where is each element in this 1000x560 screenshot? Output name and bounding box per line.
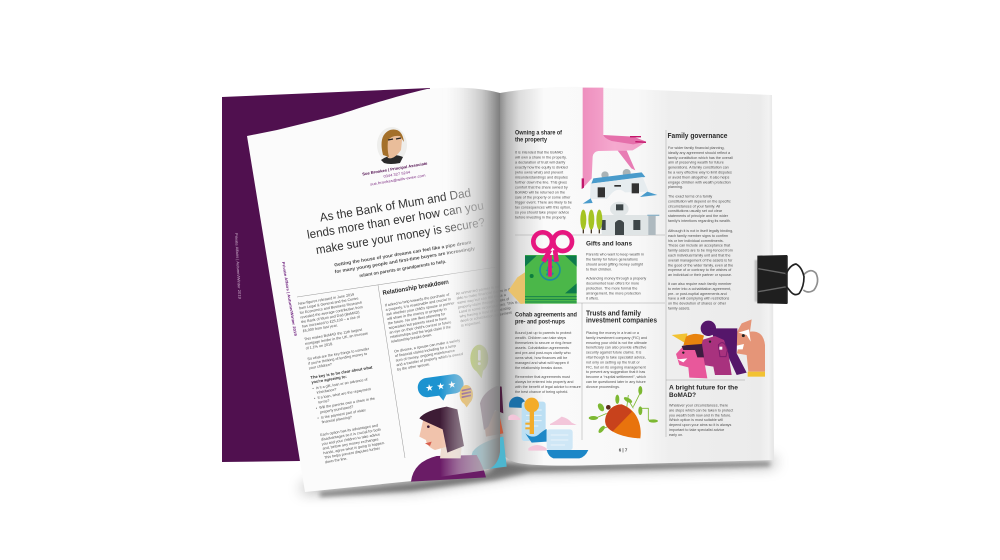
text block: owning a share: before investing in the property. xyxy=(515,216,566,220)
text block: left column: • xyxy=(315,406,318,411)
text block: cohab agreements: Remember that agreements must xyxy=(515,375,570,379)
text block: left column: Is the payment part of wider xyxy=(321,408,367,420)
text block: relationship breakdown: of financial claims including for a lump xyxy=(395,344,456,358)
text block: left column: from Legal & General and the Centre xyxy=(299,296,359,311)
contact details xyxy=(362,160,429,187)
text block: third column: able to make financial claims in the xyxy=(456,287,513,301)
text block: gifts and loans: should avoid gifting money outright xyxy=(586,262,643,266)
text block: left column: • xyxy=(317,416,320,420)
text block: left column: if you're thinking of lending money to xyxy=(308,352,367,366)
text block: left column: • xyxy=(312,387,315,391)
text block: left column: If a loan, what are the repayment xyxy=(317,387,371,400)
panel: left page xyxy=(247,88,500,492)
text block: third column: An unmarried partner is not xyxy=(455,285,500,296)
text block: left column: disadvantages so it is crucial for both xyxy=(321,428,381,442)
text block: cohab agreements: and pre-and post-nups clarify who xyxy=(515,351,571,355)
heading: bright future xyxy=(669,384,738,399)
text block: left column: This makes BoMAD the 11th largest xyxy=(304,328,362,341)
scroll two xyxy=(547,429,588,458)
text block: bright future: Whatever your circumstances, there xyxy=(669,404,728,408)
text block: family governance: engage children with wealth protection xyxy=(668,180,731,184)
text block: owning a share: will own a share in the property, xyxy=(515,156,567,160)
text block: cohab agreements: wealth. Children can take steps xyxy=(515,336,566,340)
running head on page: Private Affairs | Autumn/Winter 2019 xyxy=(281,262,297,336)
text block: left column: hands, agree what is going to happen. xyxy=(323,441,385,455)
heading: cohab agreements xyxy=(515,312,577,326)
heading: cohab agreements: pre- and post-nups xyxy=(515,318,565,326)
text block: left column: has increased to £25,100 – a rise of xyxy=(302,315,361,329)
title: make sure your money is secure? xyxy=(315,215,486,257)
text block: third column: property claim through Trusts of xyxy=(458,297,511,310)
text block: family governance: family constitution which has the overall xyxy=(668,156,733,160)
heading: trusts xyxy=(586,310,657,324)
gutter shading: left page xyxy=(440,85,500,485)
page number: 6 | 7 xyxy=(619,448,628,452)
text block: family governance: constitutions usually set out clear xyxy=(668,209,723,213)
text block: family governance: his or her individual commitments. xyxy=(668,239,724,243)
text block: family governance: statements of principle and the wider xyxy=(668,214,729,218)
text block: family governance: an individual or their partner or spouse. xyxy=(668,273,732,277)
text block: trusts: security against future claims. It is xyxy=(586,351,641,355)
text block: third column: why having a trust of ownership xyxy=(459,306,511,319)
running head on cover: Private Affairs | Autumn/Winter 2019 xyxy=(234,233,241,299)
upper tilted house xyxy=(583,169,657,204)
heading: owning a share: Owning a share of xyxy=(515,130,563,136)
text block: left column: you're agreeing to: xyxy=(311,374,347,385)
text block: relationship breakdown: will share in the money or property in xyxy=(387,307,447,321)
figure: person with cap xyxy=(672,333,707,378)
text block: bright future: important to take specialist advice xyxy=(669,428,724,432)
text block: left column xyxy=(298,291,389,464)
text block: owning a share: further down the line. This gives xyxy=(515,180,567,184)
illustration: three faces xyxy=(672,319,765,378)
text block: relationship breakdown: relationships and the legal claim if the xyxy=(390,325,451,339)
text block: third column: Land in some circumstances. This is xyxy=(459,300,518,314)
panel: right page xyxy=(500,87,774,466)
icon: exclamation bubble xyxy=(470,345,488,378)
rules: left page xyxy=(297,267,497,458)
text block: left column: of 1.1% on 2018. xyxy=(305,342,334,351)
icon: key xyxy=(524,398,539,434)
text block: family governance: family's intentions regarding its wealth. xyxy=(668,219,731,223)
heading: owning a share xyxy=(515,130,563,144)
text block: bright future: depend upon your aims so it is always xyxy=(669,423,731,427)
text block: relationship breakdown: separation but parents need to have xyxy=(388,316,447,330)
text block: relationship breakdown: relationship breaks down. xyxy=(391,333,433,344)
heading: owning a share: the property xyxy=(515,136,547,144)
text block: family governance: each family member signs to confirm xyxy=(668,234,728,238)
text block: gifts and loans: Parents who want to keep wealth in xyxy=(586,252,644,256)
text block: family governance: or avoid them altogether. It also helps xyxy=(668,175,729,179)
text block: family governance: Although it is not in itself legally binding, xyxy=(668,229,733,233)
text block: cohab agreements: with the benefit of legal advice to ensure xyxy=(515,385,581,389)
pink figure xyxy=(582,88,646,189)
text block: left column: down the line. xyxy=(325,457,348,464)
heading: trusts: Trusts and family xyxy=(586,310,641,318)
text block: family governance: each individual family unit and that the xyxy=(668,254,731,258)
contact details: Sue Brookes | Principal Associate xyxy=(362,160,429,176)
text block: family governance: For wider family financial planning, xyxy=(668,146,725,150)
text block: third column: same way but can still make a xyxy=(457,293,507,305)
subtitle: for many young people and first-time buyers are increasingly xyxy=(334,246,476,274)
text block: family governance: expense of or contrary to the wishes of xyxy=(668,268,732,272)
text block: relationship breakdown: the future. No one likes planning for xyxy=(388,312,446,326)
text block: relationship breakdown: ask whether your child's spouse or partner xyxy=(386,301,456,317)
text block: bright future: are steps which can be taken to protect xyxy=(669,408,733,412)
text block: left column: New figures released in June 2019 xyxy=(298,293,354,306)
text block: relationship breakdown: by the other spouse. xyxy=(397,362,431,372)
text block: owning a share: (who owns what) and prevent xyxy=(515,170,563,174)
text block: owning a share: a declaration of trust will clarify xyxy=(515,160,565,164)
price tag xyxy=(508,272,526,304)
illustration: fruit with vines xyxy=(589,386,658,438)
lower house xyxy=(602,202,659,235)
text block: left column: revealed the average contribution from xyxy=(300,305,363,320)
text block: left column: your children? xyxy=(309,362,332,370)
text block: relationship breakdown: sum of money, ongoing maintenance xyxy=(395,349,455,363)
text block: family governance: constitution will depend on the specific xyxy=(668,199,731,203)
text block: owning a share: comfort that the share owned by xyxy=(515,186,568,190)
text block: family governance: have a will complying with restrictions xyxy=(668,297,729,301)
pink ribbon xyxy=(533,232,572,277)
text block: relationship breakdown: If asked to help towards the purchase of xyxy=(384,292,451,307)
text block: cohab agreements: managed and what will happen if xyxy=(515,361,570,365)
title: As the Bank of Mum and Dad xyxy=(319,186,472,225)
illustration: key and scrolls xyxy=(508,397,588,458)
text block: left column: Each option has its advantages and xyxy=(320,423,378,437)
text block: cohab agreements: the best chance of being upheld. xyxy=(515,390,568,394)
text block: relationship breakdown: and a transfer of property which is owned xyxy=(396,352,463,367)
text block: left column: for Economics and Business Research xyxy=(299,301,362,315)
text block: left column: mortgage lender in the UK, an increase xyxy=(305,331,369,346)
figure: man with grey hair xyxy=(732,319,765,377)
text block: third column xyxy=(455,282,520,328)
text block: family governance: to enter into a cohabitation agreement, xyxy=(668,287,731,291)
text block: family governance: be a very effective way to limit disputes xyxy=(668,170,732,174)
text block: owning a share: It is intended that the BoMAD xyxy=(515,150,563,154)
figure: woman at left xyxy=(411,407,486,482)
heading: bright future: BoMAD? xyxy=(669,392,696,399)
text block: bright future: you wealth both now and in the future. xyxy=(669,413,731,417)
text block: gifts and loans: the family for future generations xyxy=(586,258,638,262)
trees xyxy=(580,210,602,233)
heading: Relationship breakdown: Relationship breakdown xyxy=(382,279,449,297)
text block: trusts: ensuring your child is not the ultimate xyxy=(586,341,647,345)
text block: relationship breakdown: an eye on their child's current or future xyxy=(389,320,452,335)
text block: left column: • xyxy=(314,396,316,401)
illustration: couple with speech bubbles xyxy=(411,345,507,482)
text block: third column: deed or cohabitation agreement xyxy=(460,311,512,323)
text block: trusts: can be questioned later in any future xyxy=(586,380,646,384)
text block: cohab agreements: Bound just up to parents to protect xyxy=(515,331,571,335)
text block: family governance: The exact terms of a family xyxy=(668,194,712,198)
text block: gifts and loans: protection. The more formal the xyxy=(586,286,637,290)
text block: owning a share: sale of the property or some other xyxy=(515,196,571,200)
text block: family governance: planning. xyxy=(668,185,683,189)
text block: trusts: FIC, but on its ongoing management xyxy=(586,365,646,369)
text block: family governance: It can also require each family member xyxy=(668,282,732,286)
text block: cohab agreements: owns what, how finances will be xyxy=(515,356,567,360)
text block: trusts: to prevent any suggestion that it has xyxy=(586,370,645,374)
illustration: gift of banknotes xyxy=(508,232,577,304)
banknotes: £ xyxy=(546,263,554,279)
icon: yellow bubble xyxy=(460,385,473,407)
text block: owning a share: so you should take proper advice xyxy=(515,210,569,214)
heading: gifts and loans: Gifts and loans xyxy=(586,240,632,248)
text block: family governance: generations. A family constitution can xyxy=(668,166,729,170)
text block: third column: is important. xyxy=(461,320,481,328)
title xyxy=(306,186,486,257)
text block: family governance: These can include an acceptance that xyxy=(668,244,730,248)
icon: blue speech bubble: ★ ★ ★ xyxy=(425,379,457,394)
text block: family governance: ideally any agreement should reflect a xyxy=(668,151,731,155)
heading: trusts: investment companies xyxy=(586,318,657,324)
text block: left column: and, before any money exchanges xyxy=(322,437,379,451)
text block: cohab agreements: assets. Cohabitation agreements xyxy=(515,346,569,350)
text block: family governance: overall management of the assets is for xyxy=(668,258,733,262)
shadow under magazine xyxy=(300,458,775,497)
text block: owning a share: misunderstandings and disputes xyxy=(515,176,568,180)
text block: left column: Is it a gift, loan or an advance of xyxy=(316,377,369,390)
text block: left column: £6,000 from last year. xyxy=(302,323,338,333)
text block: trusts: vital though to take specialist advice, xyxy=(586,356,646,360)
illustration: houses and pink figure xyxy=(580,88,659,235)
text block: relationship breakdown xyxy=(384,292,465,372)
text block: family governance: circumstances of your family. All xyxy=(668,204,720,208)
text block: family governance: family assets are to be ring-fenced from xyxy=(668,249,733,253)
text block: left column: you and your children to take advice xyxy=(322,432,380,446)
text block: family governance: family assets. xyxy=(668,306,690,310)
text block: gifts and loans: arrangement, the more protection xyxy=(586,292,641,296)
text block: bright future: early on. xyxy=(669,433,683,437)
subtitle xyxy=(334,240,476,278)
text block: left column: property purchased? xyxy=(320,405,354,414)
panel: purple back cover xyxy=(222,88,430,462)
rules: right page xyxy=(515,130,745,440)
text block: relationship breakdown: a property, it is reasonable and crucial to xyxy=(385,297,451,312)
text block: left column: The key is to be clear about what xyxy=(310,364,373,380)
text block: relationship breakdown: On divorce, a spouse can make a variety xyxy=(394,338,461,354)
text block: family governance: aim of preserving wealth for future xyxy=(668,161,724,165)
portrait: Sue Brookes xyxy=(377,127,407,164)
text block: gifts and loans: documented loan offers for more xyxy=(586,282,639,286)
text block: left column: terms? xyxy=(318,399,330,405)
text block: trusts: not only on setting up the trust or xyxy=(586,360,640,364)
contact details: 0344 327 5244 xyxy=(383,170,410,179)
text block: gifts and loans: to their children. xyxy=(586,268,612,272)
text block: left column: inheritance? xyxy=(316,387,337,395)
text block: cohab agreements: always be entered into properly and xyxy=(515,380,573,384)
text block: trusts: become a “nuptial settlement”, which xyxy=(586,375,646,379)
text block: left column: the Bank of Mum and Dad (BoMAD) xyxy=(301,310,360,324)
text block: family governance: the good of the wider family, even at the xyxy=(668,263,733,267)
text block: family governance: pre- or post-nuptial agreements and xyxy=(668,292,727,296)
text block: left column: financial planning? xyxy=(321,415,352,424)
text block: bright future: Which option is most suitable will xyxy=(669,418,723,422)
text block: trusts: family investment company (FIC) and xyxy=(586,336,647,340)
text block: left column: So what are the key things to consider xyxy=(307,347,370,361)
icon: black binder clip xyxy=(755,255,818,304)
text block: trusts: beneficiary can also provide effective xyxy=(586,346,646,350)
text block: owning a share: tax consequences with this option, xyxy=(515,206,571,210)
contact details: sue.brookes@wills-ewee.com xyxy=(370,173,426,187)
scroll one xyxy=(522,402,547,443)
figure: man at right xyxy=(467,386,507,472)
text block: cohab agreements: the relationship breaks down. xyxy=(515,366,563,370)
subtitle: Getting the house of your dreams can feel like a pipe dream xyxy=(334,240,472,267)
leaves xyxy=(589,386,658,434)
title: lends more than ever how can you xyxy=(306,198,485,242)
text block: cohab agreements: themselves to secure or ring-fence xyxy=(515,341,572,345)
heading: family governance: Family governance xyxy=(668,133,728,140)
heading: cohab agreements: Cohab agreements and xyxy=(515,312,577,318)
text block: gifts and loans: Advancing money through a properly xyxy=(586,276,646,280)
text block: owning a share: trigger event. There are likely to be xyxy=(515,200,572,204)
text block: trusts: divorce proceedings. xyxy=(586,385,620,389)
text block: owning a share: exactly how the equity is divided xyxy=(515,166,568,170)
text block: owning a share: BoMAD will be returned on the xyxy=(515,190,565,194)
text block: trusts: Placing the money in a trust or a xyxy=(586,331,640,335)
fruit xyxy=(605,404,641,438)
subtitle: reliant on parents or grandparents to help. xyxy=(359,259,447,278)
text block: left column: This helps prevent disputes further xyxy=(324,446,381,460)
figure: woman with bun xyxy=(701,321,747,375)
text block: gifts and loans: it offers. xyxy=(586,296,599,300)
heading: bright future: A bright future for the xyxy=(669,384,738,392)
text block: left column: Will the parents own a share in the xyxy=(319,397,375,410)
text block: family governance: on the devolution of shares or other xyxy=(668,302,727,306)
